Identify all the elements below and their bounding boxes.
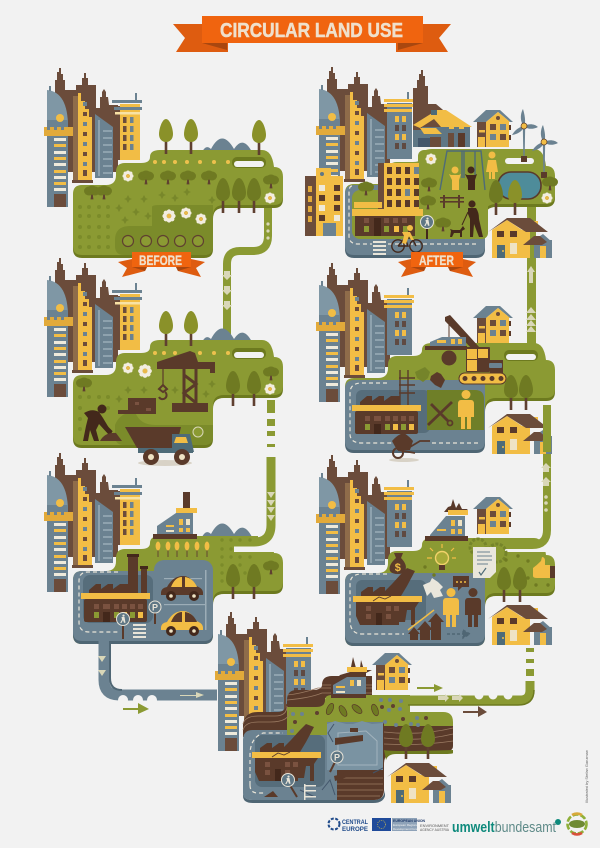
cyclist: [392, 225, 422, 252]
bushes: [76, 366, 279, 391]
pond: [489, 172, 541, 215]
connector road: before 3 to reuse: [98, 641, 217, 705]
dots: [423, 554, 550, 587]
excavator: [442, 315, 506, 384]
trees: [159, 311, 261, 406]
arrow: brown: [463, 706, 487, 717]
ruined factory: [353, 568, 422, 625]
soil particles: [290, 698, 420, 733]
document: [473, 547, 496, 578]
hill building: [425, 499, 468, 541]
big apartment: [378, 163, 419, 210]
panel: before stage 1 greenfield: [44, 68, 283, 258]
title: CIRCULAR LAND USE: [220, 19, 403, 42]
arrow: green right: [123, 703, 149, 714]
hills: [202, 524, 252, 537]
seeds: [325, 702, 380, 718]
blue house: [413, 110, 472, 147]
wheelbarrow: [389, 433, 430, 462]
house: small: [473, 306, 513, 343]
connector road: before 1 to before 2: [222, 205, 270, 345]
land: [73, 340, 283, 448]
road tick: [543, 405, 551, 452]
trees: [504, 375, 533, 410]
hills: [202, 138, 252, 152]
panels: [255, 735, 325, 787]
city skyline: [44, 453, 142, 592]
puzzle piece: [423, 578, 443, 598]
pedestrian sign: [420, 216, 434, 239]
flowers: [122, 362, 276, 394]
city skyline: [316, 455, 414, 594]
windmills: [512, 109, 558, 178]
light bulb: [427, 544, 456, 570]
logo: central europe: CENTRAL: [342, 819, 368, 826]
logo: umweltbundesamt: umweltbundesamt: [452, 819, 557, 836]
soil stripes: [243, 685, 453, 796]
city skyline: [316, 263, 414, 402]
panel: after stage 3 plan: [316, 450, 557, 646]
city skyline: [44, 68, 142, 207]
land: [287, 695, 453, 737]
land: [73, 536, 283, 644]
house: large: [387, 763, 451, 803]
land: [345, 343, 555, 451]
corn row: [156, 542, 209, 557]
logo: central europe: [328, 818, 369, 833]
hills: [202, 328, 252, 342]
gears: [470, 539, 506, 562]
grey site: [243, 722, 383, 800]
logo: european union: European Regional: [393, 823, 419, 827]
house: small: [473, 110, 513, 147]
grey road: [345, 185, 485, 258]
growth houses: [408, 613, 444, 640]
dots: [153, 351, 230, 355]
panel: after stage 2 demolition: [316, 263, 555, 462]
logo: round project: [568, 814, 586, 834]
hill factory: [153, 492, 197, 539]
panel: after stage 1 renewed site: [305, 67, 558, 258]
crossing: [373, 241, 386, 255]
low building: [352, 202, 423, 236]
field pattern: [78, 188, 216, 249]
flowers: [122, 170, 276, 224]
panel: before stage 2 construction: [44, 258, 283, 466]
house: large: [488, 605, 552, 645]
connector road: before 2 to before 3: [267, 400, 275, 447]
land: [345, 149, 555, 257]
demolished building: [425, 337, 467, 350]
field pattern: [78, 380, 216, 431]
land: [73, 150, 283, 258]
growth arrow: [408, 610, 434, 630]
trees: [497, 567, 527, 602]
grey site: [345, 380, 485, 453]
before ribbon: [118, 252, 205, 277]
soil: [243, 676, 453, 800]
tilted signs: [282, 751, 343, 797]
dashed arrow: [447, 630, 470, 638]
car: yellow: [161, 611, 203, 636]
signs: [116, 601, 161, 639]
crane: [157, 351, 215, 412]
house: small: [372, 653, 412, 690]
ruined hill building: [331, 657, 372, 698]
puzzle pieces: [415, 367, 445, 388]
crossing: [133, 624, 146, 638]
logo: central europe: EUROPE: [342, 826, 369, 833]
panel: derelict site at bottom: [215, 612, 453, 803]
people: [443, 588, 481, 627]
connector road: reuse back up to after 3: [405, 648, 534, 705]
worker shoveling: [83, 404, 122, 441]
city skyline: [316, 67, 449, 206]
circles row: [122, 236, 204, 246]
road in: [232, 457, 271, 542]
before label: BEFORE: [139, 252, 182, 268]
parking lines: [164, 570, 206, 630]
man walking dog: [450, 200, 483, 237]
illustrator credit: Illustrated by Stefan Ganzman: [585, 750, 589, 803]
swing: [440, 151, 485, 190]
house: small: [473, 497, 513, 534]
logo: european union: Development Fund: [393, 827, 419, 831]
title ribbon: [173, 16, 451, 52]
house: large: [488, 414, 552, 454]
trees: [399, 724, 435, 759]
logo: european union: [372, 818, 426, 831]
children on swing: [449, 166, 477, 190]
bushes: [84, 170, 279, 199]
money bag: $: [395, 562, 401, 574]
speech bubble: [453, 576, 469, 591]
ruined factory: [252, 724, 321, 781]
dots pattern: [220, 538, 252, 583]
adult figure: [486, 152, 498, 179]
land: [345, 538, 555, 646]
factory: [81, 554, 150, 622]
grey site: [345, 573, 485, 646]
trees: [226, 560, 279, 599]
person: [458, 390, 474, 429]
city skyline: [44, 258, 142, 397]
logo: umweltbundesamt: AGENCY AUSTRIA: [420, 828, 450, 832]
panel: before stage 3 brownfield: [44, 453, 288, 644]
after label: AFTER: [419, 252, 454, 268]
connector road: after 2 up to after 1: [526, 205, 536, 350]
logo: european union: EUROPEAN UNION: [393, 819, 426, 823]
dump truck: [125, 427, 203, 466]
logo: umweltbundesamt: ENVIRONMENT: [420, 824, 449, 828]
after ribbon: [398, 252, 476, 277]
trees: [159, 119, 266, 213]
road up: [505, 450, 547, 545]
debris: [264, 728, 363, 797]
car: brown: [161, 576, 203, 601]
house: large: [488, 218, 552, 258]
bricks: [118, 398, 156, 414]
grey site: [73, 571, 213, 644]
small apartment: [305, 168, 343, 236]
bench: [440, 195, 464, 208]
money bag: [390, 553, 406, 574]
dots: [153, 160, 230, 164]
arrow: green outline: [417, 684, 443, 692]
factory: [352, 370, 421, 434]
crossed tools: [428, 402, 452, 426]
crossing: [304, 784, 316, 800]
bushes and flowers: [358, 154, 558, 231]
city skyline: [215, 612, 313, 751]
thumbs up: [533, 557, 555, 578]
